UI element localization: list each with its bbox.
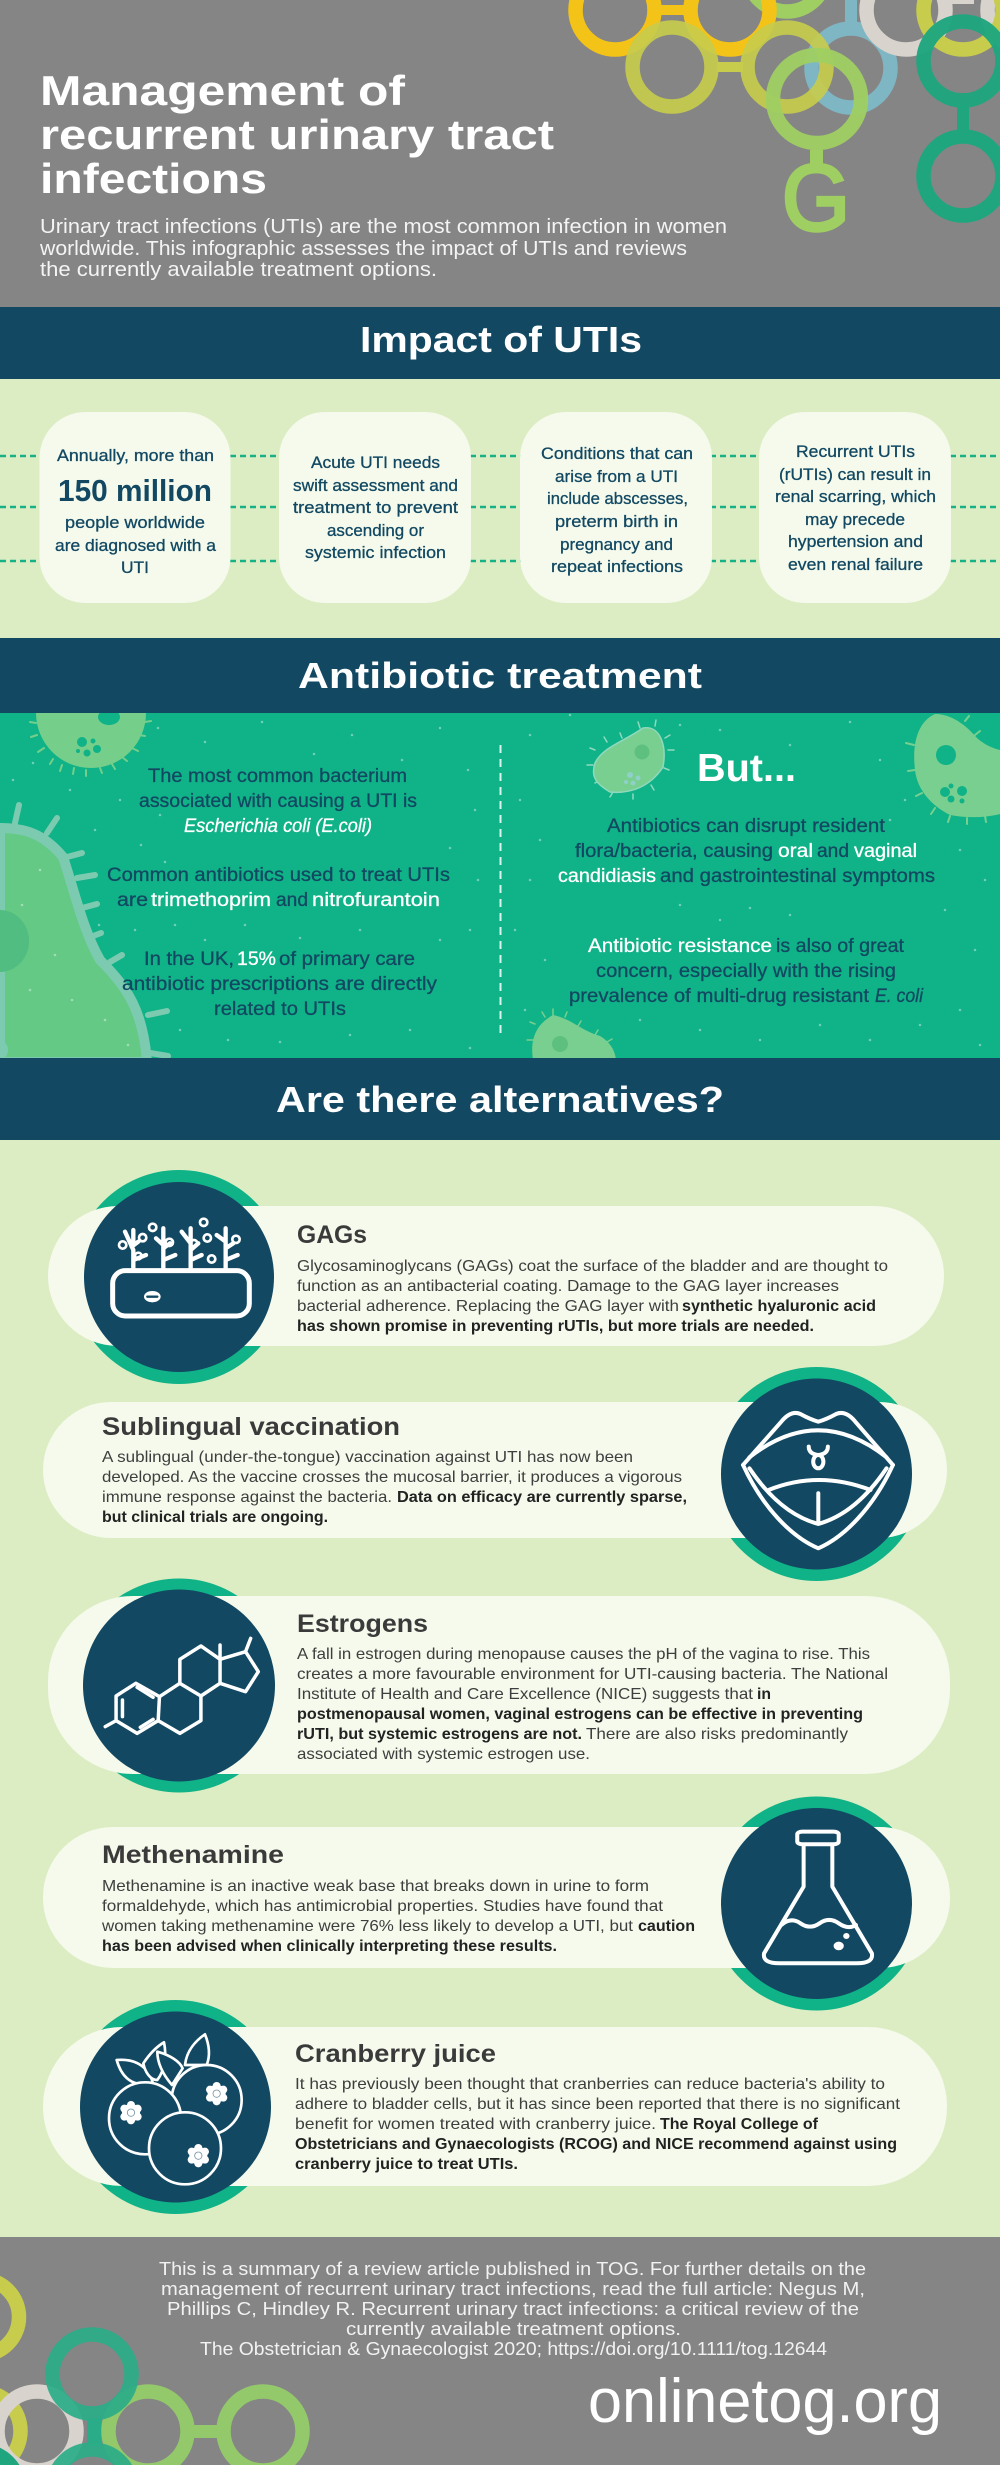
left column text: trimethoprim xyxy=(151,889,271,911)
speckles xyxy=(13,715,985,1048)
icon: cranberries xyxy=(109,2034,242,2184)
text: GAGs: has shown promise in preventing rUTIs, but more trials are needed. xyxy=(297,1318,814,1335)
heading band: Are there alternatives?: Are there alternatives? xyxy=(276,1079,724,1120)
card: 150 million xyxy=(40,412,230,603)
text: Methenamine xyxy=(101,1878,695,1955)
left column text: antibiotic prescriptions are directly xyxy=(122,973,437,995)
text: Cranberry juice: benefit for women treated with cranberry juice. xyxy=(295,2116,656,2133)
text: GAGs: Glycosaminoglycans (GAGs) coat the surface of the bladder and are thought to xyxy=(297,1258,888,1275)
alternative: Estrogens xyxy=(48,1578,950,1792)
card: recurrent UTIs: Recurrent UTIs xyxy=(796,442,915,461)
left column text: associated with causing a UTI is xyxy=(139,790,417,812)
text: Methenamine: caution xyxy=(638,1918,695,1935)
bacterium: top left xyxy=(29,713,152,777)
card: recurrent UTIs: may precede xyxy=(805,510,905,529)
heading: Sublingual vaccination: Sublingual vaccination xyxy=(102,1413,400,1441)
card: 150 million: are diagnosed with a xyxy=(55,536,217,555)
text: Cranberry juice: adhere to bladder cells, but it has since been reported that there is no significant xyxy=(295,2096,901,2113)
left column text: nitrofurantoin xyxy=(312,889,440,911)
left column text: Escherichia coli (E.coli) xyxy=(184,815,372,837)
right column text: prevalence of multi-drug resistant xyxy=(569,985,870,1007)
footer panel xyxy=(0,2237,1000,2468)
card: 150 million: Annually, more than xyxy=(57,446,214,465)
right column text: flora/bacteria, causing xyxy=(575,840,773,862)
text: Sublingual vaccination: immune response against the bacteria. xyxy=(102,1489,392,1506)
card: recurrent UTIs xyxy=(759,412,951,603)
card: recurrent UTIs: hypertension and xyxy=(788,532,923,551)
heading: Methenamine: Methenamine xyxy=(102,1841,284,1869)
text: Estrogens: in xyxy=(757,1686,771,1703)
panel: antibiotic treatment xyxy=(0,713,1000,1058)
decorative molecule rings with G logo: G xyxy=(782,145,850,250)
text: Cranberry juice: cranberry juice to treat UTIs. xyxy=(295,2156,518,2173)
right column text: E. coli xyxy=(875,985,924,1007)
text: Estrogens: Institute of Health and Care Excellence (NICE) suggests that xyxy=(297,1686,754,1703)
card: acute UTI: systemic infection xyxy=(305,543,446,562)
left column text: and xyxy=(276,889,308,911)
panel: alternatives xyxy=(0,1140,1000,2237)
text: Cranberry juice: Obstetricians and Gynaecologists (RCOG) and NICE recommend against using xyxy=(295,2136,897,2153)
citation text: This is a summary of a review article published in TOG. For further details on the xyxy=(159,2259,866,2279)
card: recurrent UTIs: even renal failure xyxy=(788,555,923,574)
text: GAGs: bacterial adherence. Replacing the GAG layer with xyxy=(297,1298,679,1315)
text: Sublingual vaccination: Data on efficacy are currently sparse, xyxy=(397,1489,687,1506)
right column text: is also of great xyxy=(776,935,905,957)
heading band: Impact of UTIs: Impact of UTIs xyxy=(360,319,642,360)
intro text: the currently available treatment options. xyxy=(40,259,437,281)
intro text xyxy=(39,216,727,281)
title: recurrent urinary tract xyxy=(40,111,554,158)
text: Sublingual vaccination: A sublingual (under-the-tongue) vaccination against UTI has now been xyxy=(102,1449,633,1466)
website address: onlinetog.org xyxy=(588,2367,942,2436)
bacterium: large left xyxy=(0,805,168,1062)
card: conditions: pregnancy and xyxy=(560,535,673,554)
card: conditions: preterm birth in xyxy=(555,512,678,531)
decorative rings xyxy=(0,2279,302,2468)
card: conditions: arise from a UTI xyxy=(555,467,678,486)
card: acute UTI: swift assessment and xyxy=(293,476,458,495)
left column text: 15% xyxy=(237,948,276,970)
intro text: worldwide. This infographic assesses the impact of UTIs and reviews xyxy=(39,238,687,260)
right column text: vaginal xyxy=(854,840,917,862)
heading: Estrogens: Estrogens xyxy=(297,1610,428,1638)
card: conditions xyxy=(520,412,712,603)
text: Methenamine: women taking methenamine were 76% less likely to develop a UTI, but xyxy=(101,1918,634,1935)
card: recurrent UTIs: (rUTIs) can result in xyxy=(779,465,931,484)
text: Estrogens xyxy=(297,1646,888,1763)
right column text: and gastrointestinal symptoms xyxy=(660,865,935,887)
text: Estrogens: creates a more favourable environment for UTI-causing bacteria. The National xyxy=(297,1666,888,1683)
decorative molecule rings with G logo xyxy=(576,0,1000,250)
card: 150 million: UTI xyxy=(121,558,149,577)
alternative: Sublingual vaccination xyxy=(43,1367,947,1581)
text: Estrogens: associated with systemic estrogen use. xyxy=(297,1746,590,1763)
card: conditions: repeat infections xyxy=(551,557,683,576)
text: Methenamine: formaldehyde, which has antimicrobial properties. Studies have found that xyxy=(102,1898,664,1915)
alternative: Cranberry juice xyxy=(43,2000,947,2214)
intro text: Urinary tract infections (UTIs) are the most common infection in women xyxy=(40,216,727,238)
heading: Cranberry juice: Cranberry juice xyxy=(295,2040,496,2068)
text: Cranberry juice: The Royal College of xyxy=(660,2116,819,2133)
card: conditions: include abscesses, xyxy=(547,489,688,508)
right column text: Antibiotic resistance xyxy=(588,935,772,957)
icon: flask xyxy=(764,1832,872,1963)
title: Management of xyxy=(40,67,406,114)
right column text: concern, especially with the rising xyxy=(596,960,896,982)
left column text: related to UTIs xyxy=(214,998,346,1020)
text: Cranberry juice xyxy=(295,2076,901,2173)
card: acute UTI: ascending or xyxy=(327,521,424,540)
text: Cranberry juice: It has previously been thought that cranberries can reduce bacteria's ability to xyxy=(295,2076,885,2093)
alternative: Methenamine xyxy=(43,1796,950,2010)
left column text: The most common bacterium xyxy=(148,765,407,787)
left column text: In the UK, xyxy=(144,948,234,970)
left column text: Common antibiotics used to treat UTIs xyxy=(107,864,450,886)
title: infections xyxy=(40,155,267,202)
card: acute UTI xyxy=(279,412,471,603)
text: GAGs: function as an antibacterial coating. Damage to the GAG layer increases xyxy=(297,1278,839,1295)
citation text xyxy=(159,2259,866,2359)
panel: impact of UTIs xyxy=(0,379,1000,638)
card: acute UTI: treatment to prevent xyxy=(293,498,458,517)
left column text: are xyxy=(117,889,148,911)
card: 150 million: 150 million xyxy=(58,473,212,508)
heading band: Antibiotic treatment xyxy=(0,638,1000,713)
text: Estrogens: There are also risks predominantly xyxy=(586,1726,848,1743)
heading band: Are there alternatives? xyxy=(0,1058,1000,1140)
right column text: Antibiotics can disrupt resident xyxy=(607,815,886,837)
bacterium: bottom xyxy=(527,1009,616,1060)
card: conditions: Conditions that can xyxy=(541,444,693,463)
icon: estrogen molecule xyxy=(105,1638,258,1733)
text: Estrogens: rUTI, but systemic estrogens are not. xyxy=(297,1726,582,1743)
citation text: Phillips C, Hindley R. Recurrent urinary tract infections: a critical review of the xyxy=(167,2299,859,2319)
text: GAGs: synthetic hyaluronic acid xyxy=(682,1298,876,1315)
heading: GAGs: GAGs xyxy=(297,1221,367,1249)
right column text: candidiasis xyxy=(558,865,656,887)
heading band: Impact of UTIs xyxy=(0,307,1000,379)
text: Estrogens: A fall in estrogen during menopause causes the pH of the vagina to rise. This xyxy=(297,1646,870,1663)
alternative: GAGs xyxy=(48,1170,944,1384)
citation text: currently available treatment options. xyxy=(346,2319,681,2339)
card: acute UTI: Acute UTI needs xyxy=(311,453,440,472)
right column text: and xyxy=(817,840,849,862)
bacterium: top right xyxy=(906,714,1000,824)
text: Sublingual vaccination xyxy=(102,1449,687,1526)
left column text: of primary care xyxy=(279,948,415,970)
right column text: oral xyxy=(778,840,813,862)
text: GAGs xyxy=(297,1258,888,1335)
bacterium: near But xyxy=(587,720,674,799)
header panel xyxy=(0,0,1000,307)
citation text: management of recurrent urinary tract infections, read the full article: Negus M, xyxy=(161,2279,865,2299)
card: 150 million: people worldwide xyxy=(65,513,205,532)
text: Methenamine: Methenamine is an inactive weak base that breaks down in urine to form xyxy=(102,1878,649,1895)
divider xyxy=(500,745,502,1038)
heading band: Antibiotic treatment: Antibiotic treatment xyxy=(298,655,702,696)
text: Sublingual vaccination: but clinical trials are ongoing. xyxy=(102,1509,328,1526)
text: Methenamine: has been advised when clinically interpreting these results. xyxy=(102,1938,557,1955)
left column text xyxy=(107,765,450,1020)
right column heading: But... xyxy=(697,747,796,790)
card: recurrent UTIs: renal scarring, which xyxy=(775,487,936,506)
text: Sublingual vaccination: developed. As the vaccine crosses the mucosal barrier, it produces a vigorous xyxy=(102,1469,682,1486)
title xyxy=(40,67,554,202)
icon: open mouth xyxy=(743,1413,893,1548)
icon: GAG layer xyxy=(113,1219,249,1316)
right column text xyxy=(558,815,935,1007)
bacteria illustrations xyxy=(0,713,1000,1058)
text: Estrogens: postmenopausal women, vaginal estrogens can be effective in preventing xyxy=(297,1706,863,1723)
citation text: The Obstetrician & Gynaecologist 2020; https://doi.org/10.1111/tog.12644 xyxy=(200,2339,827,2359)
